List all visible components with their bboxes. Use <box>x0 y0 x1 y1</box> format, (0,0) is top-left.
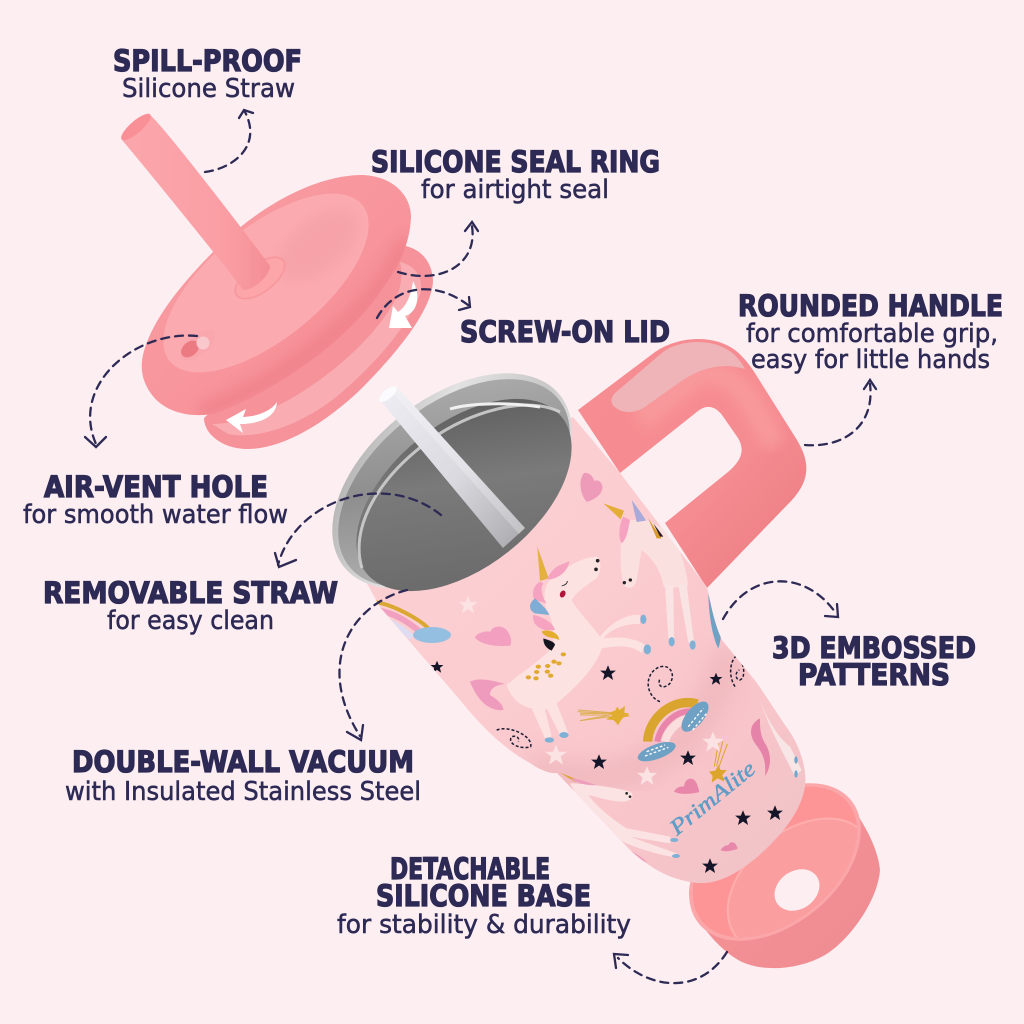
rainbow near rim <box>375 602 451 643</box>
hearts <box>674 779 699 794</box>
unicorn lower left <box>560 773 680 863</box>
handle <box>578 339 806 588</box>
base floor <box>726 818 857 937</box>
drain hole <box>766 861 828 919</box>
base rim <box>659 751 891 973</box>
label: silicone seal ring: SILICONE SEAL RING <box>371 145 660 179</box>
unicorn left <box>470 547 651 743</box>
unicorn right tail <box>751 718 770 776</box>
base interior wall <box>664 756 886 968</box>
white rotate arrow bottom <box>226 402 277 433</box>
pale stars <box>459 596 724 785</box>
removable straw <box>377 383 525 548</box>
handle grip pad <box>611 342 745 412</box>
label: rounded handle: for comfortable grip, <box>746 319 998 349</box>
waist shading <box>530 650 730 778</box>
interior wall <box>321 361 607 629</box>
arrow: rounded handle <box>805 380 876 445</box>
upper heart <box>580 473 603 502</box>
comet centre star <box>606 707 629 725</box>
comet left <box>578 706 630 725</box>
arrow: screw-on lid <box>377 289 470 318</box>
black stars <box>431 661 783 873</box>
label: removable straw: REMOVABLE STRAW <box>43 576 338 610</box>
label: double-wall vacuum <box>65 745 421 807</box>
tumbler body <box>340 417 805 883</box>
lid recess <box>134 161 398 405</box>
label: rounded handle: easy for little hands <box>751 345 990 375</box>
dashed swirl <box>497 655 744 748</box>
lid straw <box>118 110 292 307</box>
label: air-vent hole: for smooth water flow <box>23 500 288 530</box>
label: detachable silicone base <box>337 852 631 940</box>
label: 3d embossed patterns: 3D EMBOSSED <box>772 631 976 665</box>
rainbow <box>648 703 697 742</box>
lid screw thread skirt <box>204 245 433 449</box>
lid lower edge shade <box>200 240 405 412</box>
label: air-vent hole <box>23 470 288 530</box>
label: double-wall vacuum: with Insulated Stainless Steel <box>65 777 421 807</box>
label: spill-proof <box>113 44 302 104</box>
label: removable straw: for easy clean <box>107 606 274 636</box>
label: detachable silicone base: DETACHABLE <box>390 852 550 886</box>
blue cloud edge <box>708 590 721 648</box>
label: double-wall vacuum: DOUBLE-WALL VACUUM <box>72 745 414 779</box>
arrow: air vent <box>85 336 197 447</box>
label: air-vent hole: AIR-VENT HOLE <box>44 470 268 504</box>
label: removable straw <box>43 576 338 636</box>
label: silicone seal ring <box>371 145 660 205</box>
tumbler opening <box>292 330 612 632</box>
unicorn right <box>603 500 696 650</box>
arrow: 3d embossed <box>723 581 838 619</box>
label: detachable silicone base: SILICONE BASE <box>376 879 591 913</box>
arrow: spill-proof <box>205 110 253 172</box>
label: silicone seal ring: for airtight seal <box>421 175 609 205</box>
pink heart <box>475 627 511 646</box>
arrow: removable straw <box>275 494 441 567</box>
white rotate arrow right <box>389 281 417 328</box>
printed unicorn pattern <box>375 473 802 873</box>
artwork lower band <box>560 690 802 863</box>
lid side and rim <box>142 175 411 415</box>
base outer wall <box>689 786 880 968</box>
label: detachable silicone base: for stability & durability <box>337 910 631 940</box>
label: spill-proof: SPILL-PROOF <box>113 44 302 78</box>
label: rounded handle <box>738 289 1003 375</box>
arrow: double wall <box>339 590 407 740</box>
unicorn right body <box>760 702 802 776</box>
handle highlight <box>640 373 775 445</box>
arrow: seal ring <box>398 222 478 276</box>
brand name: PrimAlite <box>663 755 760 841</box>
label: screw-on lid: SCREW-ON LID <box>460 315 670 349</box>
air vent hole <box>175 324 221 366</box>
silicone base <box>689 783 880 968</box>
comet right <box>709 742 727 783</box>
artwork upper band <box>470 500 744 765</box>
label: spill-proof: Silicone Straw <box>122 74 295 104</box>
clouds <box>638 702 708 762</box>
label: 3d embossed patterns: PATTERNS <box>798 658 950 692</box>
label: 3d embossed patterns <box>772 631 976 692</box>
arrow: silicone base <box>614 952 727 983</box>
lid assembly <box>118 110 433 449</box>
